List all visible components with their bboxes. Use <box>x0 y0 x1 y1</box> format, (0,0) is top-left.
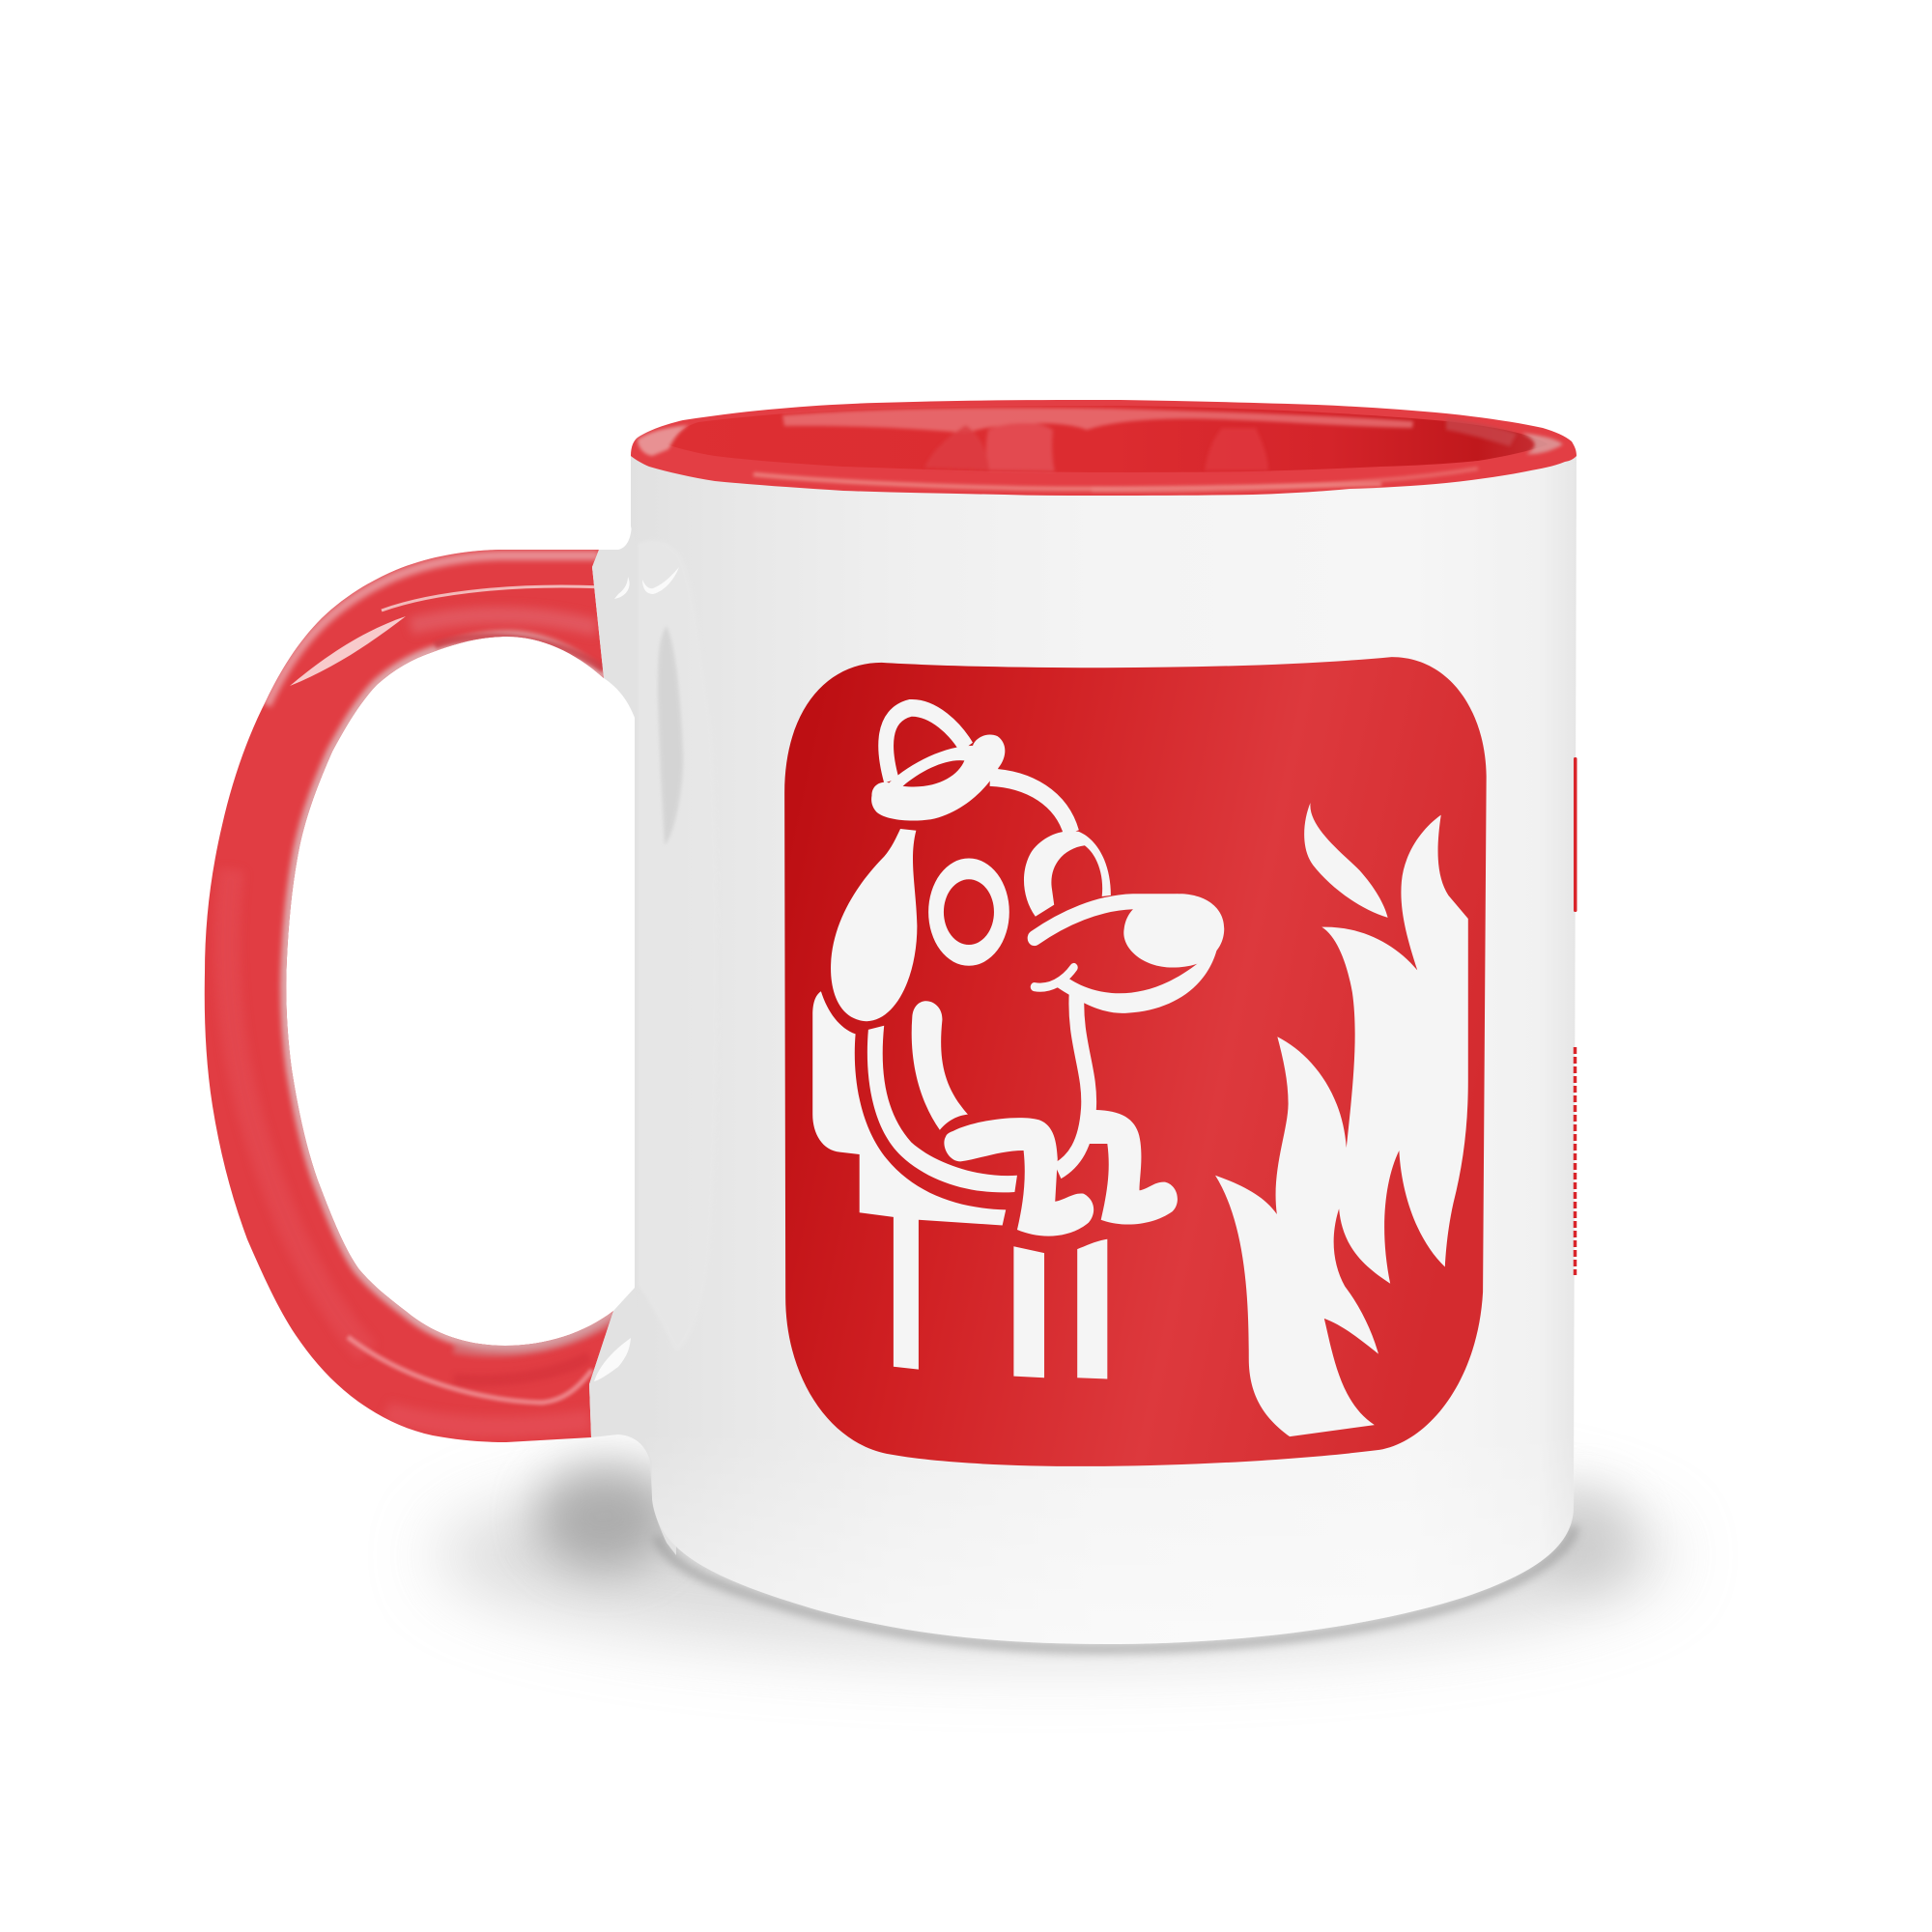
lower handle root <box>589 1288 676 1555</box>
small flame <box>1304 803 1388 918</box>
dog smile <box>1035 968 1074 987</box>
mug body <box>631 454 1577 1644</box>
badge background <box>784 657 1487 1466</box>
rim and interior <box>631 400 1577 496</box>
upper handle root <box>592 522 667 723</box>
dog eye <box>928 858 1009 966</box>
dog neck <box>1058 992 1089 1171</box>
icon: flames <box>1215 803 1468 1436</box>
handle attachment shading <box>638 540 718 1352</box>
dog mouth <box>1057 937 1219 1013</box>
dog brow <box>1024 831 1111 917</box>
dog nose <box>1123 894 1224 968</box>
main flame <box>1215 815 1468 1436</box>
chair legs <box>1013 1239 1107 1378</box>
interior reflections <box>638 408 1563 471</box>
floor shadow <box>435 1454 1671 1657</box>
dog and flames badge <box>784 657 1487 1466</box>
dog arm <box>912 1001 968 1130</box>
dog body band <box>867 1026 1017 1192</box>
dog head line <box>990 778 1071 833</box>
dog snout top <box>1035 901 1178 938</box>
handle root highlights <box>594 567 679 1381</box>
dog far leg <box>1087 1110 1178 1225</box>
mug product illustration <box>205 400 1677 1681</box>
handle <box>205 550 613 1442</box>
chair <box>812 991 1006 1370</box>
dog ear <box>831 829 917 1021</box>
icon: dog in chair <box>812 708 1224 1378</box>
dog near leg <box>944 1118 1094 1236</box>
dog hat <box>871 708 1005 821</box>
wrap-around print edge on right side <box>1574 757 1577 1275</box>
